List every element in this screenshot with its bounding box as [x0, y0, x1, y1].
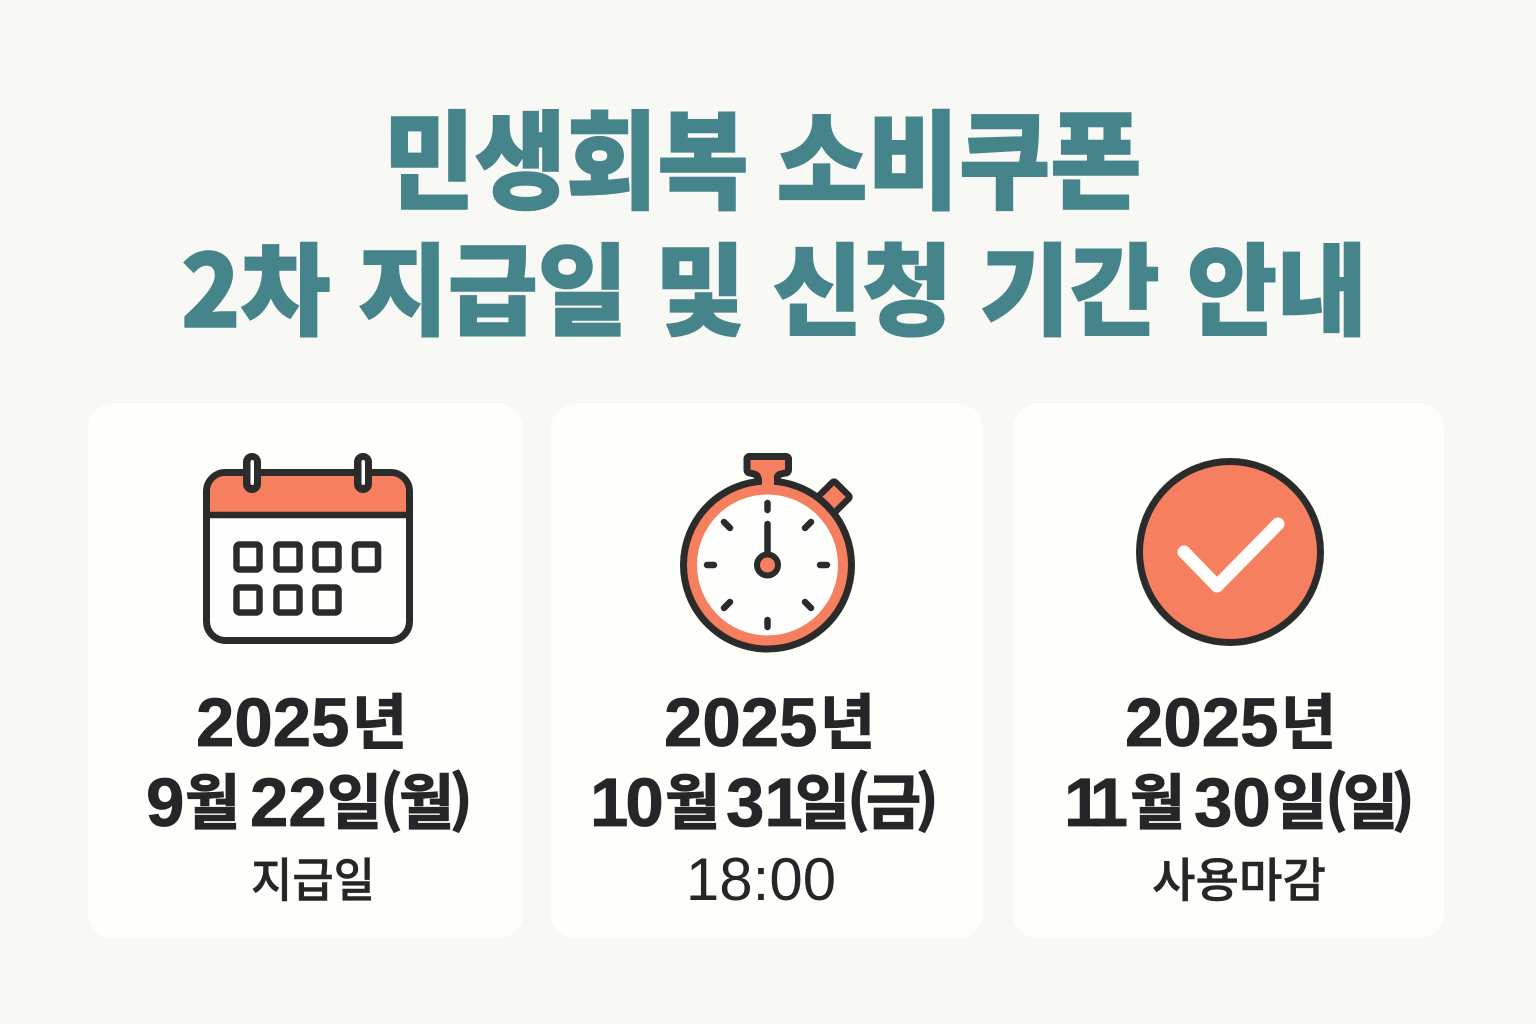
- date text: 10: [590, 764, 661, 841]
- icon: check circle: [1140, 462, 1320, 642]
- date text: 월: [185, 755, 240, 842]
- date text: 년: [352, 675, 407, 762]
- date text: 일: [327, 755, 382, 842]
- date text: 년: [1281, 675, 1336, 762]
- date text: 월: [665, 755, 720, 842]
- title: [181, 76, 1367, 356]
- date text: ): [450, 755, 473, 842]
- date text: (: [847, 755, 870, 842]
- date text: 월: [399, 755, 454, 842]
- title: 2차 지급일 및 신청 기간 안내: [181, 211, 1367, 356]
- date text: 9: [146, 764, 184, 841]
- date text: 2025: [1125, 684, 1278, 761]
- date text: 22: [250, 764, 327, 841]
- date text: 금: [866, 755, 921, 842]
- icon: stopwatch: [684, 456, 852, 649]
- date text: 년: [820, 675, 875, 762]
- date text: 2025: [196, 684, 350, 761]
- date text: 30: [1194, 764, 1271, 841]
- icon: calendar: [205, 453, 411, 640]
- date text: (: [380, 755, 403, 842]
- caption: 18:00: [686, 846, 836, 913]
- date text: 일: [1272, 755, 1327, 842]
- title: 민생회복 소비쿠폰: [384, 76, 1142, 231]
- date text: ): [1392, 755, 1415, 842]
- date text: (: [1325, 755, 1348, 842]
- caption: 지급일: [251, 842, 375, 911]
- panel: application deadline: [551, 404, 983, 938]
- panel: payment date: [88, 404, 523, 938]
- date text: 일: [1343, 755, 1398, 842]
- date text: ): [916, 755, 939, 842]
- date text: 2025: [664, 684, 818, 761]
- date text: 월: [1130, 755, 1185, 842]
- date text: 일: [795, 755, 850, 842]
- date text: 31: [726, 764, 803, 841]
- date text: 11: [1064, 764, 1127, 841]
- caption: 사용마감: [1152, 842, 1326, 911]
- panel: usage deadline: [1013, 404, 1444, 938]
